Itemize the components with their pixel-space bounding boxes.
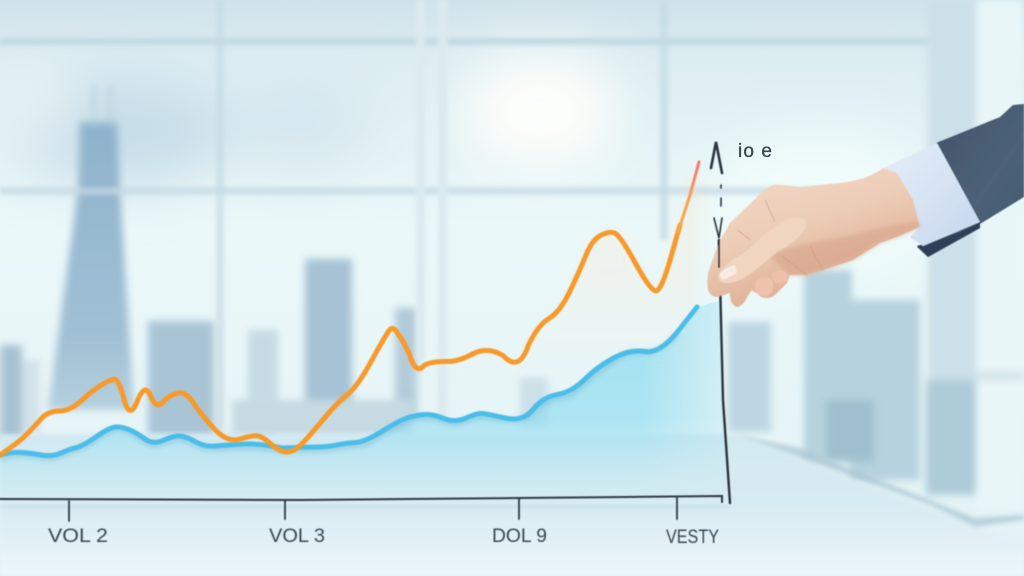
thumb xyxy=(718,218,806,283)
window frames xyxy=(0,38,930,45)
dark sleeve underside xyxy=(917,222,980,257)
palm and fingers xyxy=(707,168,920,307)
blue series shadow xyxy=(0,333,678,459)
x axis labels: VOL 3 xyxy=(269,526,325,547)
area under orange series xyxy=(400,162,698,400)
x axis labels: VOL 2 xyxy=(48,526,108,547)
blue series line xyxy=(0,307,697,456)
orange series line xyxy=(0,225,680,455)
area under blue series xyxy=(0,300,726,498)
skyline towers xyxy=(48,122,134,410)
x axis with ticks xyxy=(0,496,722,521)
shirt cuff xyxy=(883,143,980,246)
axis line drawn across fingers xyxy=(718,240,720,268)
knuckle creases xyxy=(738,200,823,275)
reaching hand and suit sleeve xyxy=(707,104,1024,307)
thumbnail xyxy=(720,265,737,279)
curled fingers xyxy=(755,277,773,296)
y axis lower part, behind the hand xyxy=(711,142,730,503)
y axis label: io e xyxy=(738,141,772,162)
chart: orange and blue area series xyxy=(0,162,726,498)
x axis labels: VESTY xyxy=(666,527,719,548)
lower palm shadow xyxy=(770,222,920,275)
table surface xyxy=(0,434,1024,576)
x axis labels: DOL 9 xyxy=(492,526,547,547)
suit sleeve xyxy=(917,104,1024,257)
orange-red rising tip xyxy=(678,162,699,232)
x axis labels xyxy=(48,526,719,548)
